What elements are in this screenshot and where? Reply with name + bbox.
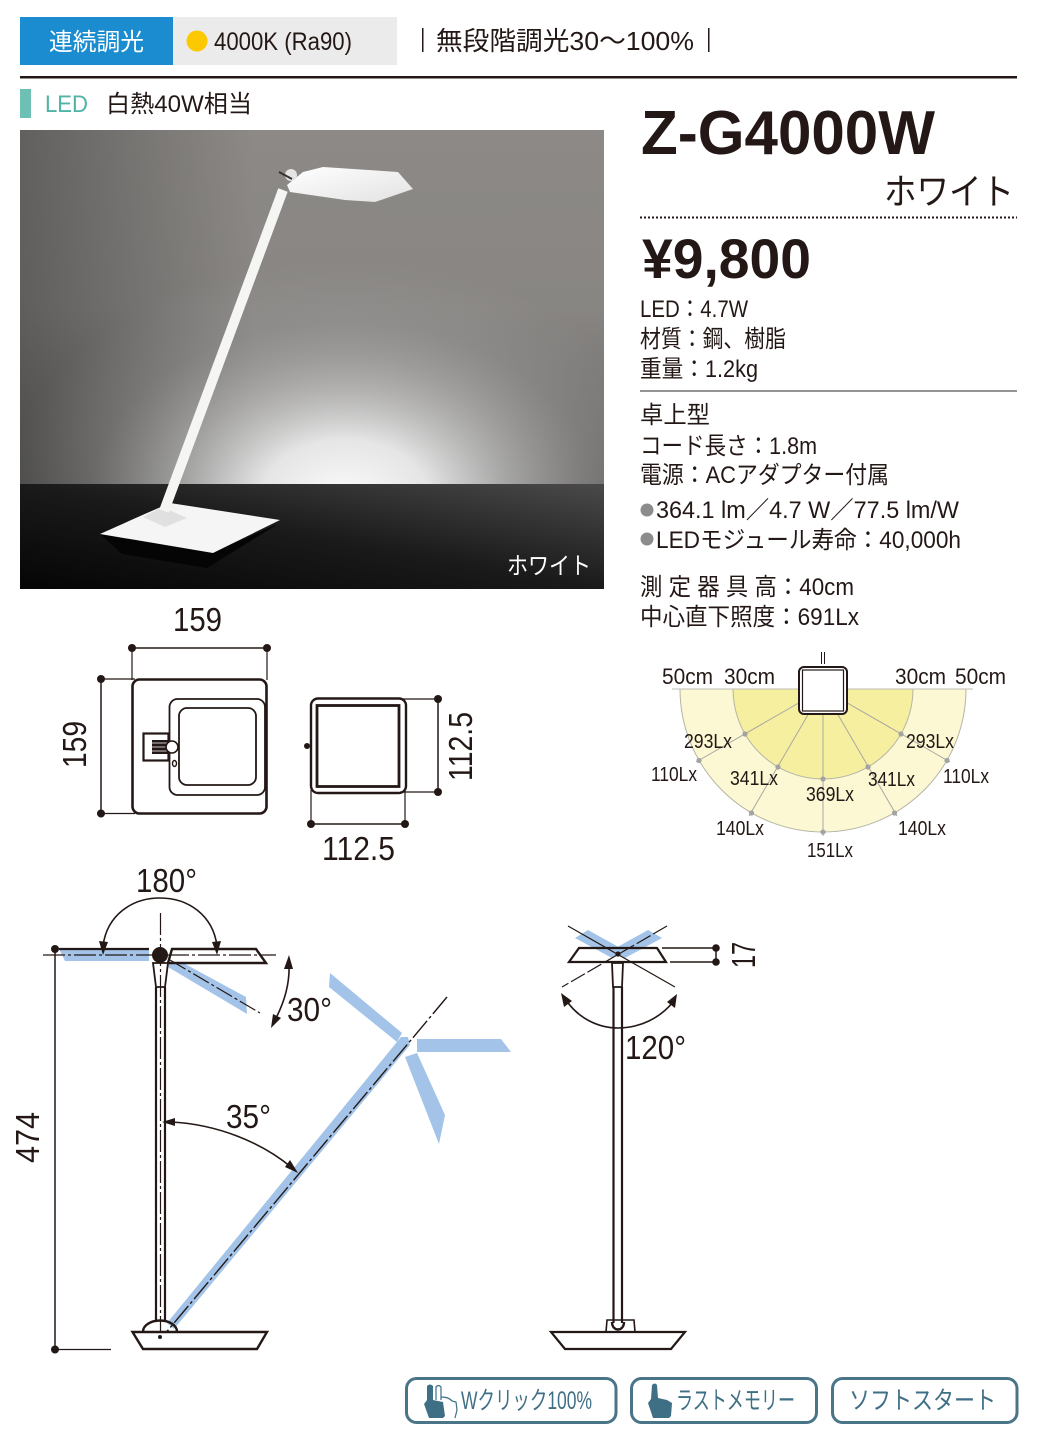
specs: power and material: 重量：1.2kg xyxy=(640,356,758,383)
chart lux values: 140Lx xyxy=(898,818,946,840)
specs: power and material: 材質：鋼、樹脂 xyxy=(640,326,786,353)
icon: one-finger hand xyxy=(648,1384,672,1418)
specs: power and material xyxy=(640,296,786,383)
chart rays xyxy=(696,689,950,836)
specs: measurement: 測 定 器 具 高：40cm xyxy=(640,574,854,601)
colour name: ホワイト xyxy=(884,171,1014,212)
front elevation: base xyxy=(551,1320,685,1349)
chart lamp plan xyxy=(799,652,847,714)
side elevation: base xyxy=(132,1320,267,1349)
dimension: 474 height xyxy=(9,945,111,1354)
specs: measurement: 中心直下照度：691Lx xyxy=(640,604,859,631)
angle arc: 35 degrees xyxy=(162,1098,298,1173)
specs: installation: コード長さ：1.8m xyxy=(640,433,817,460)
product photo xyxy=(20,130,604,589)
header note: dimming range: 無段階調光30〜100% xyxy=(436,26,694,56)
lamp joint xyxy=(279,169,297,181)
chart labels: 30cm xyxy=(895,664,946,689)
chart labels: 50cm xyxy=(955,664,1006,689)
specs: installation: 卓上型 xyxy=(640,402,710,429)
button: soft start: ソフトスタート xyxy=(849,1387,996,1415)
angle arc: 30 degrees: 30° xyxy=(287,991,332,1028)
chart lux values: 369Lx xyxy=(806,784,854,806)
dimension: 112.5 depth: 112.5 xyxy=(442,712,479,781)
lamp hinge xyxy=(143,507,187,527)
dimension: 17 xyxy=(662,942,762,968)
lamp base xyxy=(100,503,280,553)
chart lux values: 341Lx xyxy=(868,769,915,791)
icon: two-finger hand xyxy=(424,1384,457,1418)
header badge: colour temperature: 4000K (Ra90) xyxy=(214,28,352,56)
specs: installation: 電源：ACアダプター付属 xyxy=(640,462,889,489)
chart lux values xyxy=(651,731,989,862)
dimension: 112.5 width: 112.5 xyxy=(322,830,395,867)
lamp base shadow side xyxy=(100,524,278,568)
specs: installation xyxy=(640,402,889,489)
side elevation: lamp outline xyxy=(43,913,447,1338)
dimension: 159 depth: 159 xyxy=(56,721,93,768)
chart labels: 50cm xyxy=(662,664,713,689)
chart lux values: 151Lx xyxy=(807,840,853,862)
angle arc: 120 degrees xyxy=(561,993,686,1066)
lamp head xyxy=(287,167,413,202)
light source label: 白熱40W相当 xyxy=(106,91,252,118)
dimension: 159 width: 159 xyxy=(173,601,222,638)
button: last memory xyxy=(632,1378,816,1422)
chart lux values: 110Lx xyxy=(943,766,989,788)
specs: efficiency and lifetime: LEDモジュール寿命：40,000h xyxy=(656,527,961,554)
chart lux values: 110Lx xyxy=(651,764,697,786)
lamp arm xyxy=(164,190,283,511)
angle arc: 120 degrees: 120° xyxy=(625,1029,686,1066)
side elevation: rotated positions in blue xyxy=(59,949,511,1329)
angle arc: 30 degrees xyxy=(271,955,332,1028)
front elevation: rotated head in blue xyxy=(575,930,662,958)
dimension: 474 height: 474 xyxy=(9,1112,46,1163)
chart lux values: 293Lx xyxy=(906,731,954,753)
header badge: dimming type: 連続調光 xyxy=(49,29,144,56)
chart labels: 30cm xyxy=(724,664,775,689)
angle arc: 35 degrees: 35° xyxy=(226,1098,271,1135)
angle arc: 180 degrees xyxy=(99,862,221,955)
light source label: LED xyxy=(45,91,88,118)
light source label xyxy=(20,89,252,118)
chart labels xyxy=(662,664,1006,689)
front elevation: lamp outline xyxy=(562,926,675,1323)
chart lux values: 140Lx xyxy=(716,818,764,840)
model number: Z-G4000W xyxy=(641,99,935,168)
inner zone 30cm xyxy=(733,689,913,779)
plan view: head xyxy=(304,695,442,828)
button: W-click 100% xyxy=(406,1378,616,1422)
dimension: 17: 17 xyxy=(725,942,762,968)
price: ¥9,800 xyxy=(642,227,811,290)
angle arc: 180 degrees: 180° xyxy=(136,862,197,899)
specs: measurement xyxy=(640,574,859,631)
button: W-click 100%: Wクリック100% xyxy=(461,1387,592,1415)
button: last memory: ラストメモリー xyxy=(676,1387,795,1415)
chart lux values: 341Lx xyxy=(730,768,778,790)
chart lux values: 293Lx xyxy=(684,731,732,753)
button: soft start xyxy=(832,1378,1017,1422)
photo caption: ホワイト xyxy=(507,553,591,580)
header badge: colour temperature xyxy=(173,17,397,65)
outer zone 50cm xyxy=(680,689,966,832)
chart measurement dots xyxy=(696,731,950,835)
specs: efficiency and lifetime xyxy=(640,497,961,554)
specs: power and material: LED：4.7W xyxy=(640,296,748,323)
specs: efficiency and lifetime: 364.1 lm／4.7 W／77.5 lm/W xyxy=(656,497,959,524)
header badge: dimming type xyxy=(20,17,173,65)
plan view: base xyxy=(97,644,271,818)
illuminance chart xyxy=(651,652,1006,862)
